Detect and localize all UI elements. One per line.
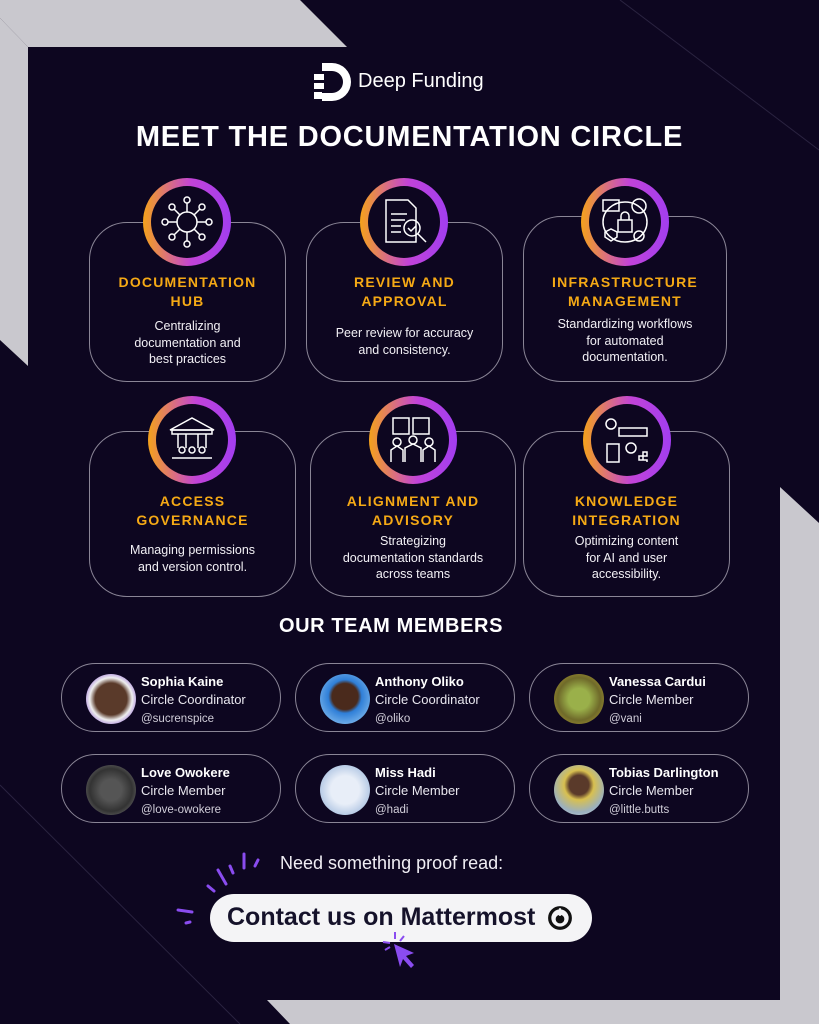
panel: alignment: Strategizing <box>380 534 446 548</box>
panel: knowledge: INTEGRATION <box>572 512 681 528</box>
panel: documentation hub: documentation and <box>134 336 241 350</box>
panel: infrastructure: for automated <box>586 334 664 348</box>
panel: alignment: across teams <box>376 567 450 581</box>
icon: burst lines <box>176 852 260 924</box>
member: Sophia: @sucrenspice <box>141 713 214 725</box>
member: Vanessa: Circle Member <box>609 692 694 707</box>
member: Tobias: Tobias Darlington <box>609 765 719 780</box>
panel: infrastructure: MANAGEMENT <box>568 293 682 309</box>
panel: documentation hub <box>89 222 286 382</box>
member: Hadi: Circle Member <box>375 783 460 798</box>
member: Hadi: Miss Hadi <box>375 765 436 780</box>
logo: Deep Funding <box>358 70 484 92</box>
member: Vanessa: @vani <box>609 713 642 725</box>
member: Sophia: Sophia Kaine <box>141 674 223 689</box>
icon: puzzle team <box>369 396 457 484</box>
panel: access: ACCESS <box>160 493 225 509</box>
panel: access: Managing permissions <box>130 543 255 557</box>
member: Hadi <box>295 754 515 823</box>
panel: alignment <box>310 431 516 597</box>
panel: knowledge: KNOWLEDGE <box>575 493 678 509</box>
title: MEET THE DOCUMENTATION CIRCLE <box>136 121 683 153</box>
member: Love <box>61 754 281 823</box>
member: Tobias: @little.butts <box>609 804 669 816</box>
icon: knowledge integration <box>583 396 671 484</box>
panel: knowledge <box>523 431 730 597</box>
icon: infrastructure <box>581 178 669 266</box>
panel: review: REVIEW AND <box>354 274 455 290</box>
member: Anthony: @oliko <box>375 713 410 725</box>
panel: access: GOVERNANCE <box>136 512 249 528</box>
icon: document review <box>360 178 448 266</box>
panel: documentation hub: DOCUMENTATION <box>119 274 256 290</box>
member: Tobias: Circle Member <box>609 783 694 798</box>
heading: team members: OUR TEAM MEMBERS <box>279 615 503 637</box>
button: contact us <box>210 894 592 942</box>
panel: knowledge: Optimizing content <box>575 534 678 548</box>
icon: governance <box>148 396 236 484</box>
member: Vanessa: Vanessa Cardui <box>609 674 706 689</box>
panel: access: and version control. <box>138 560 247 574</box>
panel: review <box>306 222 503 382</box>
icon: mattermost <box>548 906 572 930</box>
panel: review: and consistency. <box>358 342 451 356</box>
panel: alignment: ALIGNMENT AND <box>347 493 479 509</box>
member: Love: Circle Member <box>141 783 226 798</box>
panel: knowledge: for AI and user <box>586 550 667 564</box>
panel: alignment: documentation standards <box>343 550 483 564</box>
member: Anthony: Anthony Oliko <box>375 674 464 689</box>
icon: network hub <box>143 178 231 266</box>
panel: alignment: ADVISORY <box>372 512 454 528</box>
member: Anthony: Circle Coordinator <box>375 692 480 707</box>
icon: cursor <box>382 932 414 968</box>
panel: review: APPROVAL <box>361 293 448 309</box>
panel: review: Peer review for accuracy <box>336 326 473 340</box>
panel: infrastructure: documentation. <box>582 350 668 364</box>
member: Sophia: Circle Coordinator <box>141 692 246 707</box>
panel: documentation hub: Centralizing <box>154 319 220 333</box>
member: Anthony <box>295 663 515 732</box>
button: contact us: Contact us on Mattermost <box>227 903 535 931</box>
panel: documentation hub: HUB <box>171 293 204 309</box>
member: Hadi: @hadi <box>375 804 408 816</box>
member: Love: Love Owokere <box>141 765 230 780</box>
callout text: Need something proof read: <box>280 853 503 873</box>
panel: infrastructure <box>523 216 727 382</box>
member: Vanessa <box>529 663 749 732</box>
logo <box>314 63 484 101</box>
member: Tobias <box>529 754 749 823</box>
panel: access <box>89 431 296 597</box>
member: Love: @love-owokere <box>141 804 221 816</box>
panel: documentation hub: best practices <box>149 352 226 366</box>
panel: infrastructure: Standardizing workflows <box>558 317 692 331</box>
member: Sophia <box>61 663 281 732</box>
panel: infrastructure: INFRASTRUCTURE <box>552 274 698 290</box>
panel: knowledge: accessibility. <box>592 567 661 581</box>
